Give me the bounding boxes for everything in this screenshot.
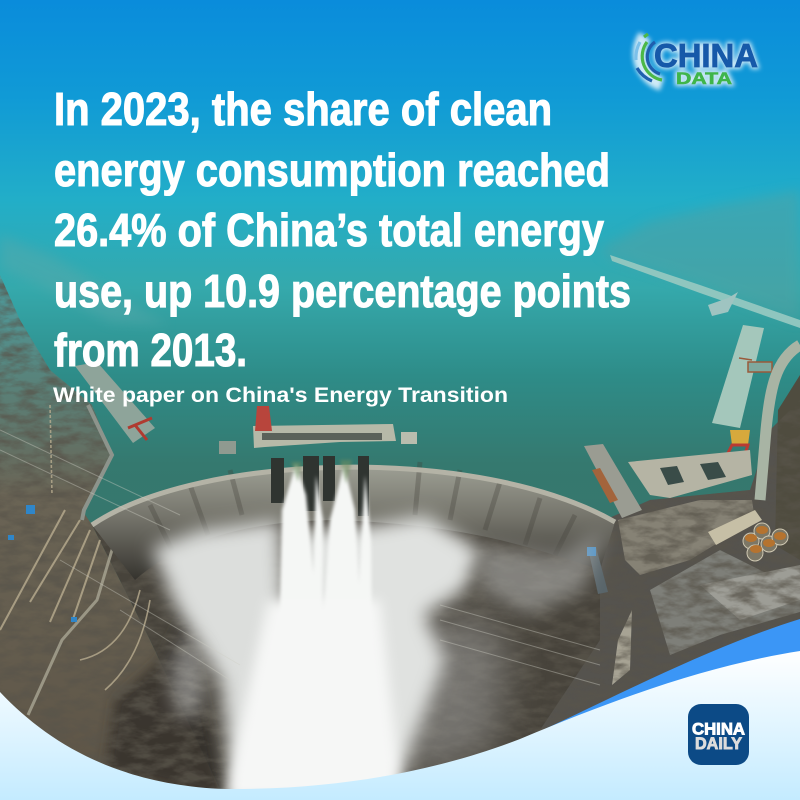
- logo: China Data: [636, 34, 758, 88]
- headline: from 2013.: [54, 324, 247, 376]
- rock texture overlay: [0, 279, 800, 789]
- right bank land base: [542, 422, 800, 730]
- logo: China Daily: DAILY: [695, 734, 743, 753]
- logo word: DATA: DATA: [676, 69, 732, 88]
- logo: China Daily: [688, 704, 749, 765]
- water green tint at top of falls: [291, 460, 352, 484]
- headline: 26.4% of China’s total energy: [54, 204, 604, 256]
- right land patches: [612, 500, 800, 685]
- small tower: [401, 432, 417, 444]
- white gradient panel: [0, 651, 800, 800]
- logo word: CHINA: CHINA: [654, 37, 758, 74]
- logo arcs: [636, 34, 662, 81]
- blue-roofed barge: [588, 547, 608, 594]
- dam vertical texture: [150, 462, 575, 555]
- logo glow: DATA: [676, 69, 732, 88]
- gorge deep shadow, left: [102, 626, 221, 789]
- headline: use, up 10.9 percentage points: [54, 265, 631, 317]
- right road: [760, 345, 800, 500]
- left seawall: [82, 405, 112, 520]
- main spray left: [152, 520, 295, 790]
- dam crest road: [92, 467, 615, 525]
- main spray right: [300, 515, 480, 780]
- upper right dock: [708, 292, 738, 316]
- round caissons: [743, 523, 788, 561]
- logo: China Daily: CHINA: [692, 720, 745, 738]
- lower left wisp: [170, 640, 206, 720]
- hazy mountains, right: [600, 190, 800, 322]
- power lines: [0, 430, 600, 685]
- hazy mountains, left: [0, 238, 152, 324]
- river barge, left: [75, 362, 155, 443]
- waterfalls: [279, 464, 372, 640]
- cargo platform: [628, 450, 752, 498]
- power intake platform: [219, 406, 417, 454]
- small tower left: [219, 441, 236, 454]
- long shed: [708, 510, 762, 545]
- piers and platforms, right: [584, 255, 800, 594]
- grey haze, right gorge: [405, 610, 510, 785]
- spray cloud: [152, 515, 605, 790]
- logo glow: [640, 36, 758, 88]
- dam wall: [92, 467, 615, 580]
- diagonal pier: [584, 444, 642, 518]
- spillway openings: [271, 456, 369, 516]
- logo glow: CHINA: [654, 37, 758, 74]
- headline: In 2023, the share of clean: [54, 83, 552, 135]
- bottom light wave: [0, 619, 800, 800]
- upper shoreline strip: [610, 255, 800, 328]
- headline: energy consumption reached: [54, 144, 610, 196]
- long pier: [712, 325, 764, 428]
- yellow crane: [730, 430, 750, 445]
- slope service roads: [0, 405, 150, 715]
- headline: [54, 83, 631, 376]
- source line: White paper on China's Energy Transition: [53, 384, 508, 407]
- blue machinery, left slope: [8, 505, 77, 622]
- blue wave band: [510, 619, 800, 745]
- right hillside strip: [775, 375, 800, 560]
- left river bank: [0, 275, 225, 800]
- falls plume: [225, 600, 402, 800]
- red gantry crane: [255, 406, 272, 431]
- dark gorge below dam: [92, 520, 600, 789]
- haze, far right of dam: [480, 530, 605, 615]
